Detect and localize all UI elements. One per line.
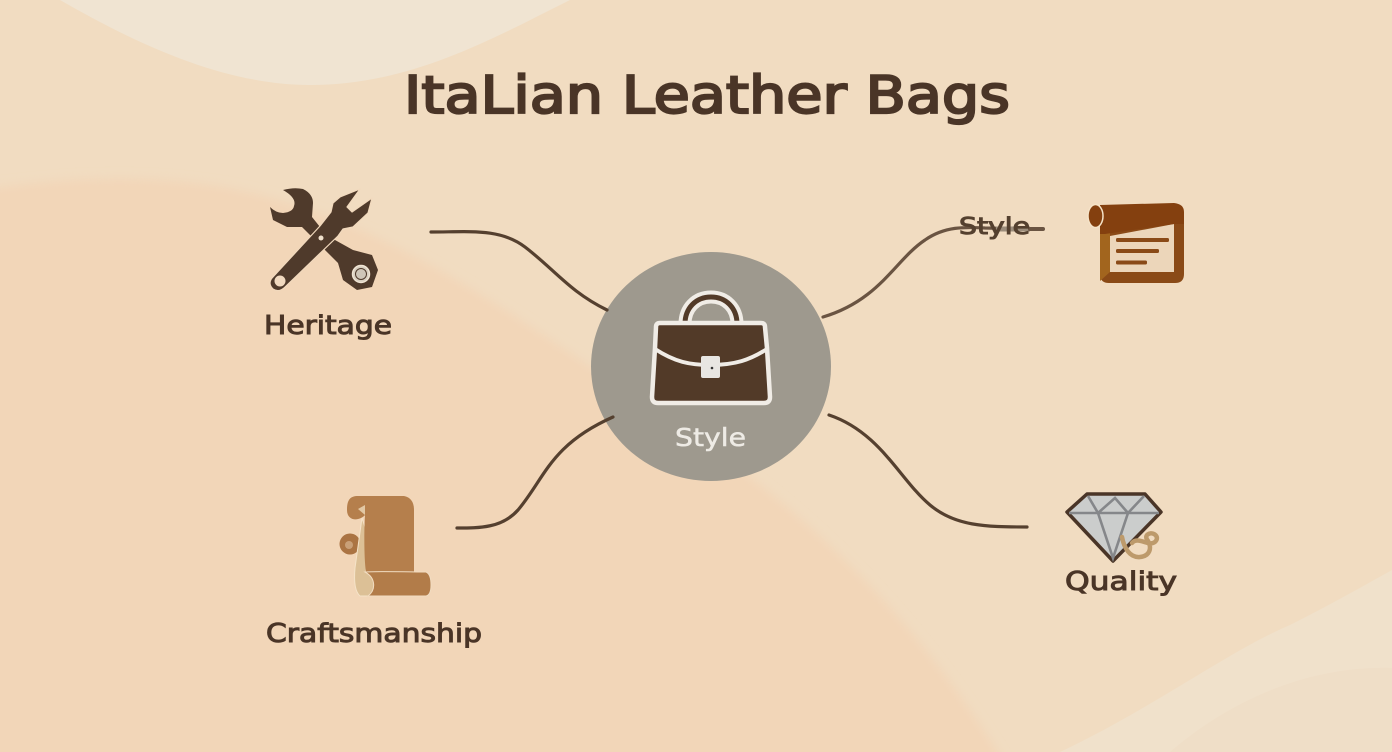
connector: Craftsmanship to centre <box>457 417 613 528</box>
label: Style (right): Style <box>959 214 1030 240</box>
icon: handbag <box>652 297 770 403</box>
node: Style (right) <box>959 203 1184 283</box>
icon: document folder <box>1088 203 1184 283</box>
connector: Quality to centre <box>829 415 1027 527</box>
label: Style (centre): Style <box>675 423 746 452</box>
node: Heritage <box>264 188 392 341</box>
icon: crossed wrenches <box>270 188 378 291</box>
node: Quality <box>1065 494 1177 597</box>
node: Craftsmanship <box>266 496 482 649</box>
central circle: Style <box>591 252 831 481</box>
label: Quality: Quality <box>1065 567 1177 597</box>
icon: diamond <box>1067 494 1161 561</box>
icon: parchment scroll <box>340 496 431 596</box>
label: Craftsmanship: Craftsmanship <box>266 619 482 649</box>
connector: Heritage to centre <box>431 232 607 310</box>
connector: Style to centre <box>823 227 1030 317</box>
title: ItaLian Leather Bags <box>404 66 1010 126</box>
label: Heritage: Heritage <box>264 311 392 341</box>
